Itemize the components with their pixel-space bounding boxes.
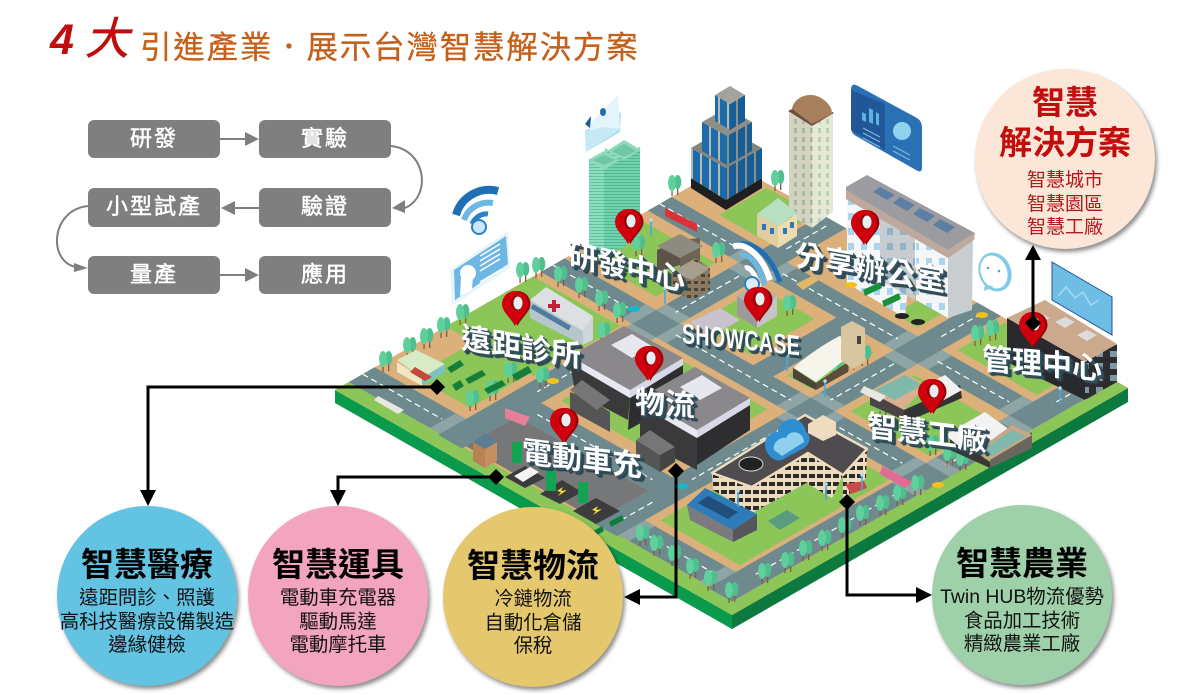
building: charging lot and brick block [473,433,624,538]
process step: mass production [88,256,220,294]
connector: logistics to smart logistics [624,463,684,605]
solutions heading [999,84,1131,161]
process step: experiment [259,120,391,158]
process step: experiment: 實驗 [301,126,349,151]
building: white barn [793,321,865,390]
map label: remote clinic: 遠距診所 [461,322,581,374]
circle: smart vehicles [248,506,428,686]
building: hospital [530,287,593,345]
connector: management centre to smart solutions [1025,245,1041,331]
building: blue skyscraper [691,86,762,210]
logistics list: 保稅 [514,635,552,657]
agriculture list: 食品加工技術 [964,610,1080,632]
agriculture list: 精緻農業工廠 [964,633,1080,655]
building: smart factories [870,373,1032,468]
connector: charging to smart vehicles [330,469,504,506]
map label: shared office: 分享辦公室 [795,239,945,298]
map label: showcase: SHOWCASE [682,318,800,361]
medical list: 高科技醫療設備製造 [60,611,234,633]
solutions list: 智慧城市 [1027,170,1103,191]
building: main H block with helipad [712,415,867,513]
icon: signal wave over showcase [733,244,780,291]
vehicles list: 電動車充電器 [280,587,396,609]
hedges [447,360,532,394]
charging lot pavement [466,417,648,520]
building: research centre [657,234,710,300]
map label: EV charging: 電動車充 [522,436,642,484]
medical heading: 智慧醫療 [81,546,213,583]
circle: smart agriculture [932,505,1112,685]
vehicles list [280,587,396,656]
title number: 4 [50,16,74,64]
solutions list: 智慧工廠 [1027,217,1103,238]
building: cream tower with brown dome [788,95,834,228]
map label: management centre: 管理中心 [982,343,1102,386]
icon: line chart card [1052,262,1112,335]
isometric city map [335,86,1128,629]
circle: smart solutions [975,69,1155,249]
icon: floating wifi [456,190,498,234]
icon: security cloud on main block [765,419,810,461]
logistics list [485,588,581,657]
logistics list: 自動化倉儲 [485,612,581,634]
building: showcase block [690,283,777,336]
building: blue-roof warehouse [687,488,757,542]
circle: smart medical [57,506,237,686]
process step: research: 研發 [130,126,178,151]
ground platform sides [335,388,1128,629]
trees along streets [379,170,999,603]
medical list: 邊緣健檢 [108,634,186,656]
connector: clinic to smart medical [140,379,445,506]
map location pins [502,209,1048,443]
solutions list [1027,170,1103,238]
map label: logistics: 物流 [635,386,695,423]
agriculture list: Twin HUB物流優勢 [940,586,1104,608]
title character: 大 [85,15,129,64]
icon: dashboard card [851,85,922,171]
process step: small trial production: 小型試產 [106,194,202,219]
logistics heading: 智慧物流 [467,547,599,584]
building: small clinic [397,350,445,386]
process step: verification [259,188,391,227]
title text: 引進產業．展示台灣智慧解決方案 [140,29,640,65]
building: logistics warehouse B [636,367,750,472]
medical list: 遠距問診、照護 [79,587,215,609]
building: shared office [846,175,975,318]
logistics list: 冷鏈物流 [494,588,572,610]
flow arrows [57,132,422,282]
icon: mail envelope [585,95,621,152]
map label: research centre: 研發中心 [568,238,684,298]
map label: smart factory: 智慧工廠 [867,410,987,458]
solutions list: 智慧園區 [1027,194,1103,214]
lamps [649,218,1062,507]
building: small teal-roof block [757,198,797,248]
title [49,15,640,65]
agriculture heading: 智慧農業 [956,545,1088,582]
building: management centre [1007,300,1117,400]
vehicles [374,208,988,530]
building: logistics warehouse A [570,326,683,432]
vehicles list: 電動摩托車 [290,634,386,656]
solutions heading: 智慧 [1032,84,1098,121]
vehicles list: 驅動馬達 [299,611,377,633]
process step: application [259,256,391,294]
medical list [60,587,234,656]
icon: medical record card [450,231,510,306]
process step: small trial production [88,188,220,227]
process step: application: 應用 [301,262,349,287]
process step: verification: 驗證 [301,194,349,219]
icon: chat bubble [973,247,1017,297]
connector: main block to smart agriculture [839,494,932,603]
process step: research [88,120,220,158]
vehicles heading: 智慧運具 [272,546,404,583]
process step: mass production: 量產 [130,262,178,287]
streets and blocks [335,163,1128,615]
building: teal twin towers [588,140,641,258]
solutions heading: 解決方案 [999,124,1131,161]
circle: smart logistics [443,507,623,687]
agriculture list [940,586,1104,655]
